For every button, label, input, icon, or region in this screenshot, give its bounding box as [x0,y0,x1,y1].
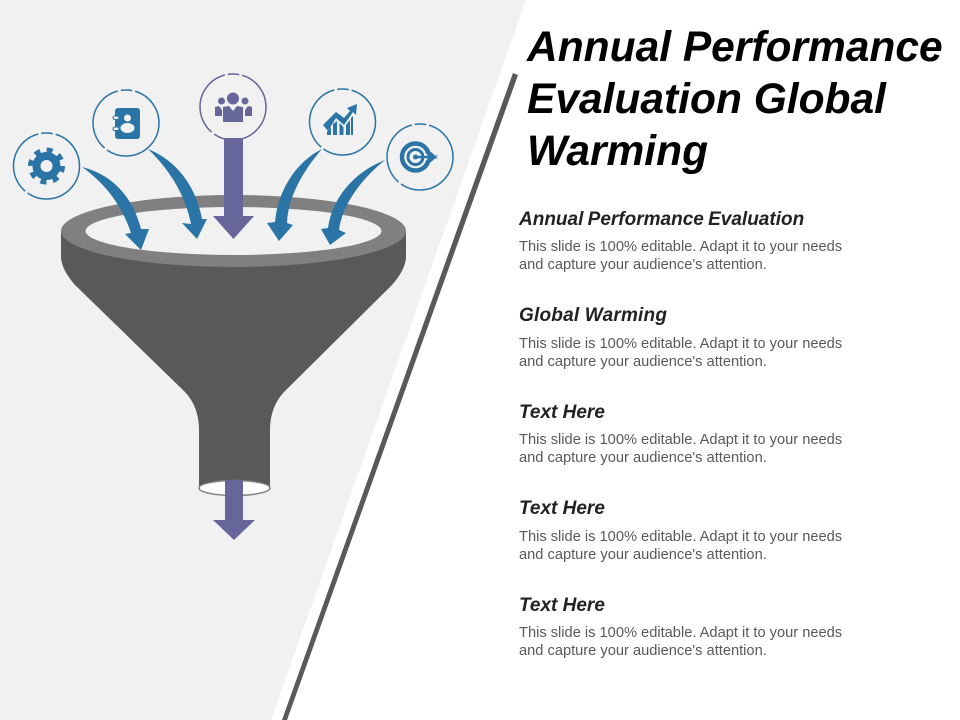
arrow: funnel output [213,480,255,540]
text block: text here 2: This slide is 100% editable. Adapt it to your needs [519,529,842,545]
text block: text here 2: and capture your audience's attention. [519,547,767,563]
text block: text here 1: Text Here [519,402,605,423]
text block: annual performance evaluation: This slide is 100% editable. Adapt it to your needs [519,239,842,255]
text block: text here 1: and capture your audience's attention. [519,450,767,466]
arrow: team to funnel [213,138,254,239]
icon: team [200,74,266,140]
text block: global warming: Global Warming [519,305,667,326]
text block: text here 3 [519,595,842,659]
title: Annual Performance Evaluation Global Warming [527,24,943,175]
text block: text here 3: Text Here [519,595,605,616]
funnel [61,195,406,496]
icon: growth chart [310,89,376,155]
text block: global warming [519,305,842,370]
arrow: gear to funnel [82,167,149,250]
text block: annual performance evaluation [518,209,842,273]
text block: text here 1 [519,402,842,466]
text block: text here 3: and capture your audience's attention. [519,643,767,659]
icon: gear [14,133,80,199]
text block: text here 2: Text Here [519,498,605,519]
text block: global warming: This slide is 100% editable. Adapt it to your needs [519,336,842,352]
background panel [0,0,526,720]
arrow: chart to funnel [267,149,322,241]
arrow: target to funnel [321,160,385,245]
icon: address book [93,90,159,156]
diagonal line [282,73,518,720]
text block: annual performance evaluation: and capture your audience's attention. [519,257,767,273]
text block: text here 1: This slide is 100% editable. Adapt it to your needs [519,432,842,448]
text block: text here 2 [519,498,842,563]
arrow: contacts to funnel [148,149,207,239]
text block: annual performance evaluation: Annual Performance Evaluation [519,209,804,230]
text block: text here 3: This slide is 100% editable. Adapt it to your needs [519,625,842,641]
icon: target [387,124,453,190]
text block: global warming: and capture your audience's attention. [519,354,767,370]
